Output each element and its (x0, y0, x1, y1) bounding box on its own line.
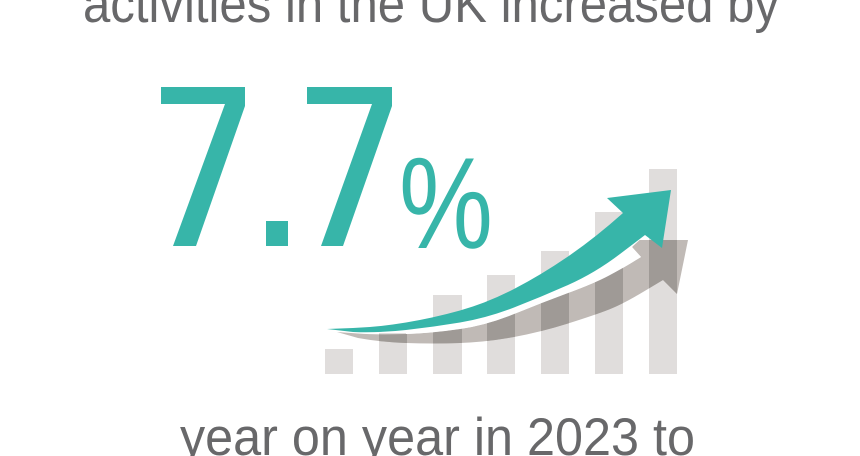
bar chart (325, 169, 677, 374)
second digit 7 (307, 87, 392, 246)
big number: 7.7 (161, 87, 392, 246)
white gap under teal arrow (406, 235, 645, 334)
digit 7 (161, 87, 245, 246)
percent sign: % (399, 130, 493, 276)
teal arrow (327, 190, 671, 332)
decimal point (266, 221, 288, 246)
grey shadow arrow (337, 240, 688, 344)
